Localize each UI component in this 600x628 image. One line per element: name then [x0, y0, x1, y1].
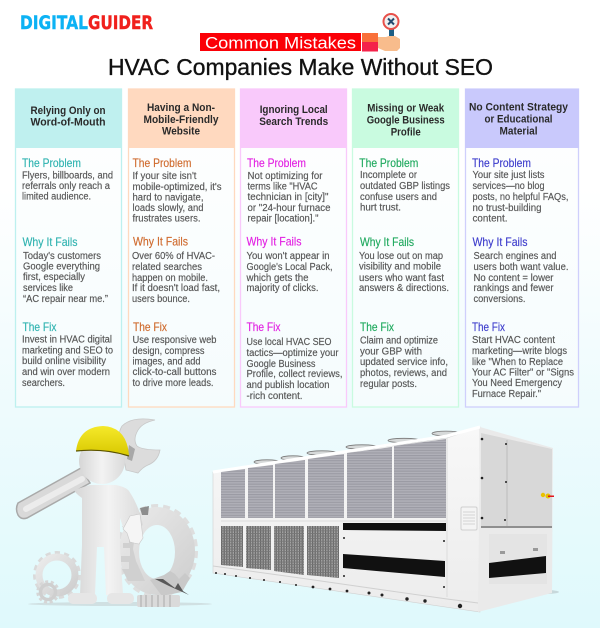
text: the fix: [22, 320, 113, 389]
text: the problem: [472, 156, 568, 224]
text: the fix: Start HVAC content: [472, 335, 555, 346]
text: the problem: posts, no helpful FAQs,: [472, 192, 568, 203]
panel heading: Having a Non-: [147, 102, 215, 114]
text: the fix: The Fix: [472, 320, 505, 334]
text: the fix: Claim and optimize: [360, 336, 438, 346]
icon: hand holding a mistake sign: [362, 14, 400, 52]
text: the problem: The Problem: [132, 156, 192, 170]
worker hand: [123, 514, 143, 544]
text: the fix: tactics—optimize your: [246, 348, 339, 359]
icon: yellow hard hat: [76, 426, 129, 456]
text: the problem: [22, 156, 113, 203]
lower grilles: [221, 526, 339, 578]
text: why it fails: answers & directions.: [359, 283, 449, 294]
heading: HVAC Companies Make Without SEO: HVAC Companies Make Without SEO: [108, 54, 493, 80]
text: why it fails: related searches: [132, 262, 202, 273]
text: the fix: regular posts.: [360, 379, 417, 390]
illustration: rooftop HVAC chiller unit: [213, 427, 559, 612]
text: why it fails: majority of clicks.: [246, 283, 318, 294]
chiller front face: [213, 427, 480, 612]
icon: large gear: [117, 506, 196, 607]
text: the problem: loads slowly, and: [132, 203, 204, 214]
icon: top fans: [254, 431, 460, 464]
panel heading: Material: [500, 126, 538, 138]
text: why it fails: services like: [23, 283, 73, 294]
text: why it fails: You won't appear in: [246, 251, 330, 262]
chiller top edge: [213, 427, 480, 472]
panel heading: Ignoring Local: [260, 104, 328, 116]
text: why it fails: Why It Fails: [472, 235, 528, 249]
panel: ignoring local search trends: [240, 89, 347, 407]
text: the problem: The Problem: [359, 156, 418, 170]
panel: non-mobile-friendly website: [128, 89, 235, 407]
text: the problem: or "24-hour furnace: [248, 203, 331, 214]
text: why it fails: users both want value.: [474, 262, 568, 273]
icon: wrench: [16, 419, 160, 519]
text: the problem: no trust-building: [472, 203, 542, 214]
text: the fix: The Fix: [360, 320, 394, 334]
text: the problem: limited audience.: [22, 192, 91, 203]
panel heading: Relying Only on: [30, 105, 106, 117]
text: the fix: [246, 320, 342, 402]
text: why it fails: rankings and fewer: [474, 283, 554, 294]
worker feet: [68, 593, 134, 604]
text: the problem: repair [location].": [248, 214, 319, 224]
text: the fix: marketing and SEO to: [22, 346, 113, 356]
panel heading: Word-of-Mouth: [30, 116, 106, 128]
text: why it fails: Google's Local Pack,: [246, 262, 332, 273]
logo: Digital Guider: DIGITAL: [20, 13, 88, 34]
side lower panel: [489, 534, 547, 584]
text: why it fails: happen on mobile.: [132, 273, 208, 284]
chiller corner seam: [221, 438, 447, 597]
text: the problem: services—no blog: [472, 181, 544, 192]
worker body: [74, 485, 143, 595]
yellow switches and red handle: [541, 493, 554, 498]
text: the fix: The Fix: [22, 320, 57, 334]
text: the problem: outdated GBP listings: [360, 181, 450, 192]
text: the problem: [247, 156, 331, 224]
text: the problem: [132, 156, 222, 224]
text: why it fails: [359, 235, 449, 294]
text: the fix: build online visibility: [22, 356, 106, 367]
panel heading: Website: [162, 126, 200, 138]
panel heading: Missing or Weak: [367, 103, 445, 115]
text: the problem: Flyers, billboards, and: [22, 170, 113, 181]
chiller base seam: [213, 566, 478, 603]
text: why it fails: Why It Fails: [246, 234, 302, 248]
text: the fix: Profile, collect reviews,: [246, 369, 342, 380]
text: the fix: updated service info,: [360, 357, 448, 368]
text: the problem: Your site just lists: [472, 170, 545, 181]
text: the problem: referrals only reach a: [22, 181, 110, 192]
coil louvers: [221, 439, 446, 518]
text: the fix: Your AC Filter" or "Signs: [472, 368, 574, 378]
panel heading: No Content Strategy: [469, 102, 568, 114]
bolts: [215, 438, 507, 608]
text: the fix: [472, 320, 574, 400]
text: the fix: Furnace Repair.": [472, 389, 541, 400]
side access panel: [481, 433, 552, 526]
panel heading: Google Business: [367, 114, 445, 126]
text: the problem: confuse users and: [360, 192, 437, 203]
text: why it fails: You lose out on map: [359, 251, 443, 262]
panel heading: [352, 89, 459, 148]
text: the fix: and publish location: [246, 380, 330, 391]
text: why it fails: which gets the: [246, 273, 309, 284]
text: why it fails: Why It Fails: [133, 234, 188, 248]
icon: small gears: [36, 554, 78, 602]
text: the fix: Use responsive web: [132, 335, 217, 346]
text: the problem: terms like "HVAC: [248, 182, 318, 192]
text: why it fails: Over 60% of HVAC-: [132, 251, 215, 262]
text: the fix: marketing—write blogs: [472, 346, 567, 357]
panel heading: [465, 89, 579, 148]
text: the fix: You Need Emergency: [472, 378, 562, 389]
text: the fix: Use local HVAC SEO: [246, 337, 332, 348]
text: the fix: to drive more leads.: [132, 378, 214, 389]
text: the problem: mobile-optimized, it's: [132, 182, 222, 193]
text: the problem: The Problem: [22, 156, 81, 170]
worker head: [79, 438, 125, 484]
black front bands: [343, 523, 446, 577]
text: why it fails: Why It Fails: [360, 235, 414, 249]
text: the fix: Google Business: [246, 359, 316, 370]
panel heading: [240, 89, 347, 148]
text: why it fails: users who want fast: [359, 273, 444, 284]
text: the fix: Invest in HVAC digital: [22, 335, 112, 346]
text: why it fails: conversions.: [474, 294, 526, 305]
text: why it fails: [132, 234, 220, 305]
panel heading: Profile: [391, 126, 421, 138]
text: the problem: content.: [472, 214, 508, 224]
panel heading: Mobile-Friendly: [144, 114, 218, 126]
text: why it fails: users bounce.: [132, 294, 190, 305]
panel heading: Search Trends: [259, 116, 328, 128]
text: the fix: your GBP with: [360, 346, 422, 358]
panel heading: [128, 89, 235, 148]
text: the fix: photos, reviews, and: [360, 368, 447, 379]
text: the fix: [360, 320, 448, 390]
text: why it fails: “AC repair near me.”: [23, 294, 108, 305]
text: the problem: If your site isn't: [132, 171, 197, 182]
logo: Digital Guider: [20, 13, 153, 34]
text: the problem: [359, 156, 450, 214]
text: the problem: Not optimizing for: [248, 171, 323, 182]
text: why it fails: [246, 234, 332, 294]
text: the problem: The Problem: [472, 156, 531, 170]
text: the fix: and win over modern: [22, 367, 110, 378]
logo: Digital Guider: GUIDER: [88, 13, 153, 34]
text: the fix: click-to-call buttons: [132, 367, 217, 378]
panel: relying only on word-of-mouth: [15, 89, 122, 407]
text: the problem: frustrates users.: [132, 214, 200, 224]
text: the problem: technician in [city]": [248, 192, 329, 203]
title banner: Common Mistakes: Common Mistakes: [205, 34, 356, 52]
text: the fix: The Fix: [246, 320, 281, 334]
text: why it fails: [472, 235, 568, 305]
illustration: worker with wrench and gears: [16, 419, 212, 607]
text: the fix: design, compress: [132, 346, 205, 357]
text: the problem: The Problem: [247, 156, 306, 170]
text: why it fails: first, especially: [23, 272, 85, 283]
text: the fix: like "When to Replace: [472, 357, 563, 368]
text: why it fails: Today's customers: [23, 251, 101, 262]
chiller side face: [478, 427, 553, 612]
text: why it fails: Why It Fails: [22, 235, 78, 249]
text: the fix: [132, 320, 217, 389]
text: the fix: searchers.: [22, 378, 65, 389]
text: the fix: -rich content.: [246, 391, 302, 402]
panel: no content strategy or educational material: [465, 89, 579, 407]
text: the problem: Incomplete or: [360, 170, 418, 181]
text: the fix: images, and add: [132, 356, 200, 368]
panel heading: or Educational: [484, 114, 552, 126]
text: the problem: hurt trust.: [360, 202, 401, 214]
text: why it fails: [22, 235, 108, 305]
text: the fix: The Fix: [133, 320, 167, 334]
text: why it fails: No content = lower: [474, 273, 554, 284]
panel heading: [15, 89, 122, 148]
text: why it fails: If it doesn't load fast,: [132, 283, 220, 294]
text: why it fails: Search engines and: [474, 251, 556, 262]
text: the problem: hard to navigate,: [132, 192, 204, 204]
text: why it fails: visibility and mobile: [359, 262, 441, 272]
panel: missing or weak google business profile: [352, 89, 459, 407]
text: why it fails: Google everything: [23, 262, 100, 272]
vent box: [461, 507, 477, 530]
